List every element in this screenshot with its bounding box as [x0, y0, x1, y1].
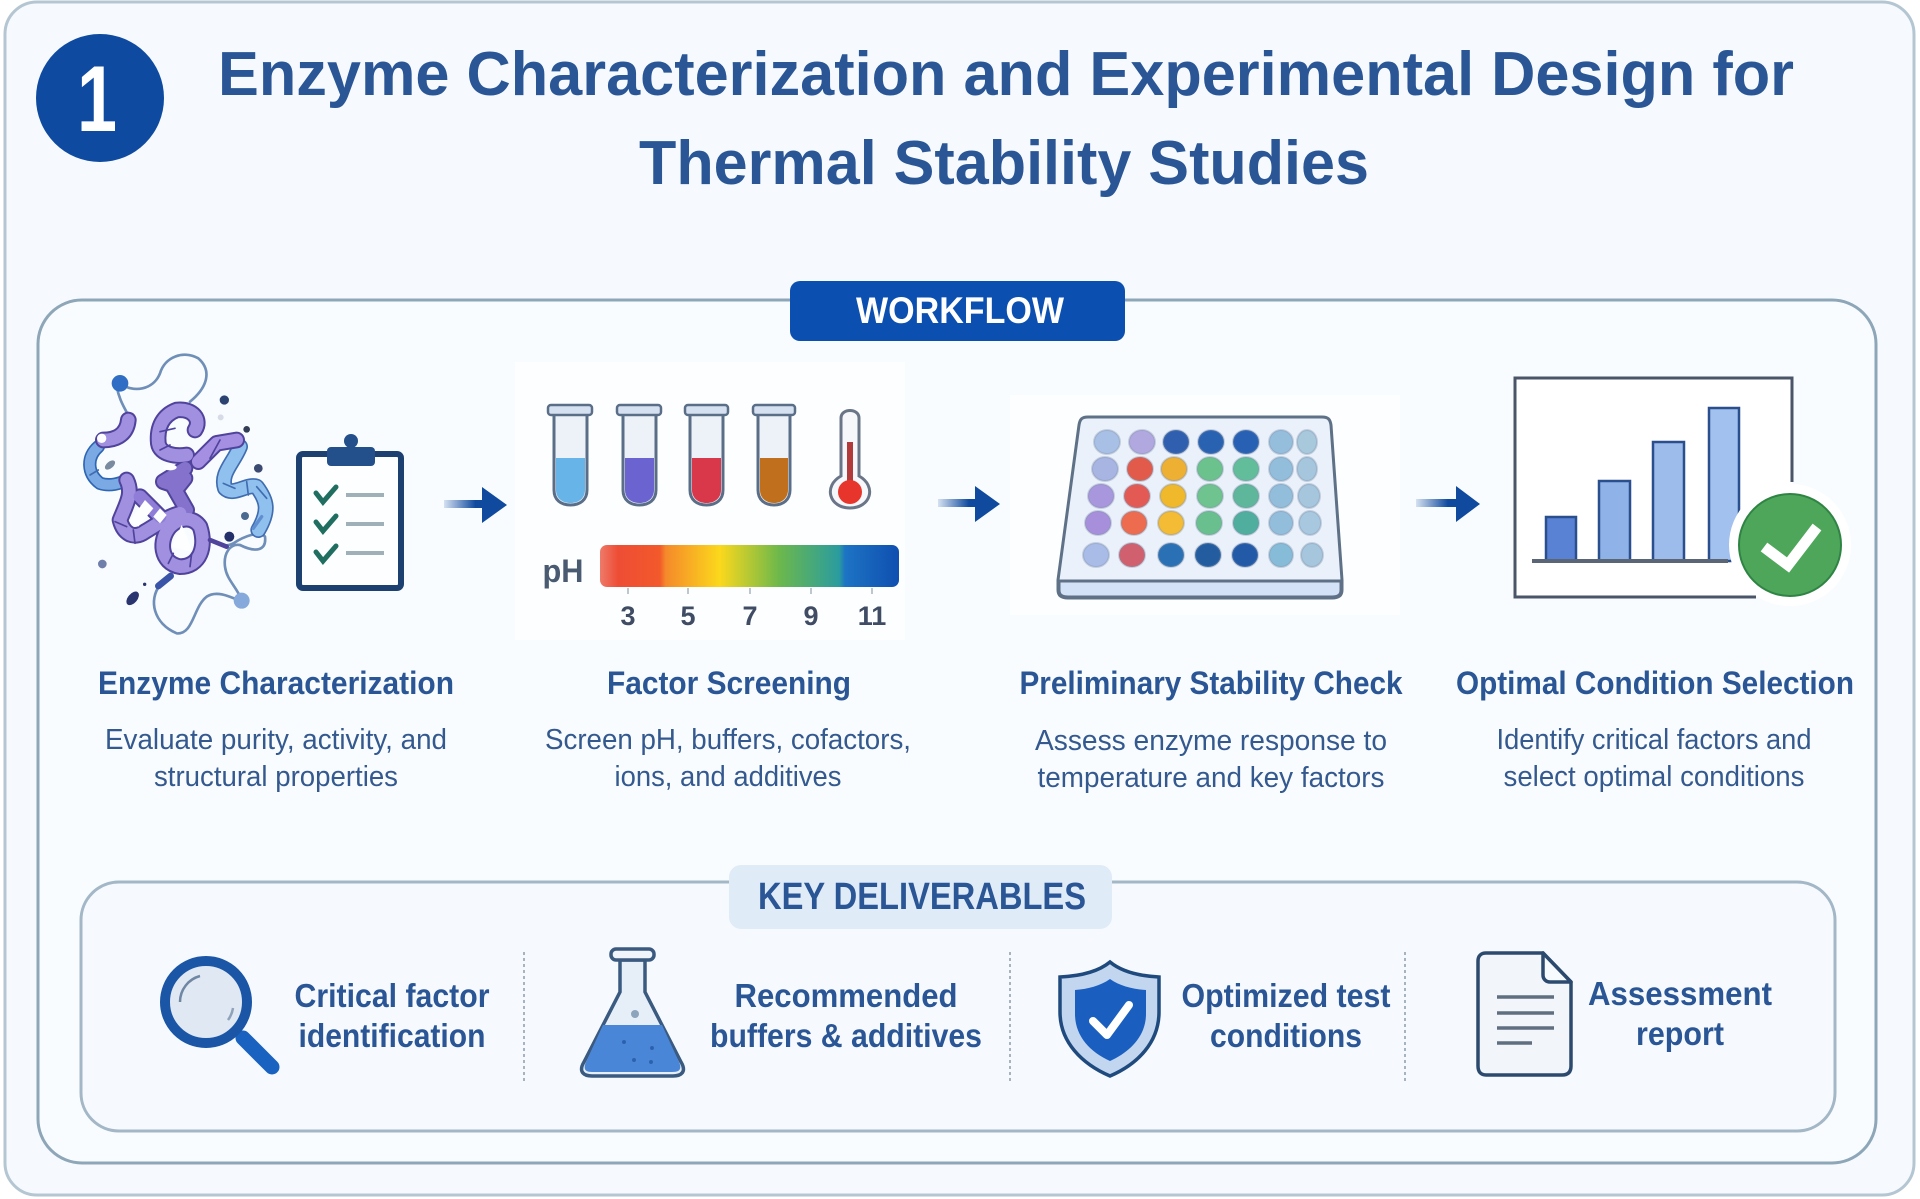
step 4 text: Optimal Condition Selection	[1456, 665, 1854, 701]
tube blue	[548, 405, 592, 505]
deliverable 1 text: identification	[298, 1017, 486, 1054]
pH scale: pH	[542, 553, 584, 589]
icon: shield with check	[1060, 962, 1159, 1076]
pH scale: 11	[858, 601, 886, 631]
tube violet	[617, 405, 661, 505]
icon: clipboard checklist	[299, 434, 401, 588]
deliverable 3 text: Optimized test	[1182, 977, 1391, 1014]
pH scale: 9	[803, 601, 819, 631]
step 2 text: Factor Screening	[607, 665, 851, 701]
deliverable 2 text: Recommended	[734, 977, 958, 1014]
title	[218, 40, 1794, 198]
icon: test tubes and thermometer	[515, 362, 905, 640]
tube amber	[753, 405, 795, 505]
pH scale: 7	[742, 601, 758, 631]
deliverable 1 text	[294, 977, 490, 1054]
deliverable 2 text: buffers & additives	[710, 1017, 982, 1054]
step 1 text	[98, 665, 454, 793]
step 2 text: Screen pH, buffers, cofactors,	[545, 724, 911, 756]
panel: key deliverables	[81, 865, 1835, 1131]
step 1 text: structural properties	[154, 761, 398, 793]
step 2 text: ions, and additives	[614, 761, 842, 793]
tube red	[685, 405, 728, 505]
deliverable 3 text: conditions	[1210, 1017, 1362, 1054]
step 3 text: temperature and key factors	[1038, 762, 1384, 794]
pH scale: 5	[680, 601, 696, 631]
arrow: step 3 to 4	[1416, 486, 1480, 522]
panel: workflow	[38, 281, 1876, 1163]
icon: report document	[1478, 953, 1571, 1075]
deliverable 2 text	[710, 977, 982, 1054]
step 1 text: Evaluate purity, activity, and	[105, 724, 447, 756]
title: Enzyme Characterization and Experimental Design for	[218, 40, 1794, 109]
step 3 text	[1020, 665, 1403, 794]
key deliverables label pill	[729, 865, 1112, 929]
icon: bar chart with check badge	[1515, 378, 1851, 606]
step 4 text: Identify critical factors and	[1496, 724, 1812, 756]
step 3 text: Assess enzyme response to	[1035, 725, 1387, 757]
deliverable 1 text: Critical factor	[294, 977, 490, 1014]
arrow: step 2 to 3	[938, 486, 1000, 522]
title: Thermal Stability Studies	[639, 129, 1369, 198]
number badge	[36, 34, 164, 162]
icon: well plate	[1010, 395, 1400, 615]
number badge: 1	[77, 46, 117, 151]
step 3 text: Preliminary Stability Check	[1020, 665, 1403, 701]
step 2 text	[545, 665, 911, 793]
icon: magnifying glass	[165, 961, 272, 1067]
step 4 text: select optimal conditions	[1504, 761, 1804, 793]
pH scale: 3	[620, 601, 636, 631]
deliverable 4 text: Assessment	[1588, 975, 1772, 1012]
pH scale	[542, 545, 899, 631]
deliverable 3 text	[1182, 977, 1391, 1054]
icon: flask	[582, 949, 683, 1076]
step 1 text: Enzyme Characterization	[98, 665, 454, 701]
thermometer	[830, 410, 870, 508]
icon: enzyme protein structure	[90, 355, 267, 633]
check badge	[1739, 494, 1841, 596]
workflow label pill: WORKFLOW	[856, 290, 1064, 331]
workflow label pill	[790, 281, 1125, 341]
step 4 text	[1456, 665, 1854, 793]
key deliverables label pill: KEY DELIVERABLES	[758, 876, 1086, 918]
deliverable 4 text: report	[1636, 1015, 1724, 1052]
deliverable 4 text	[1588, 975, 1772, 1052]
arrow: step 1 to 2	[444, 487, 507, 523]
